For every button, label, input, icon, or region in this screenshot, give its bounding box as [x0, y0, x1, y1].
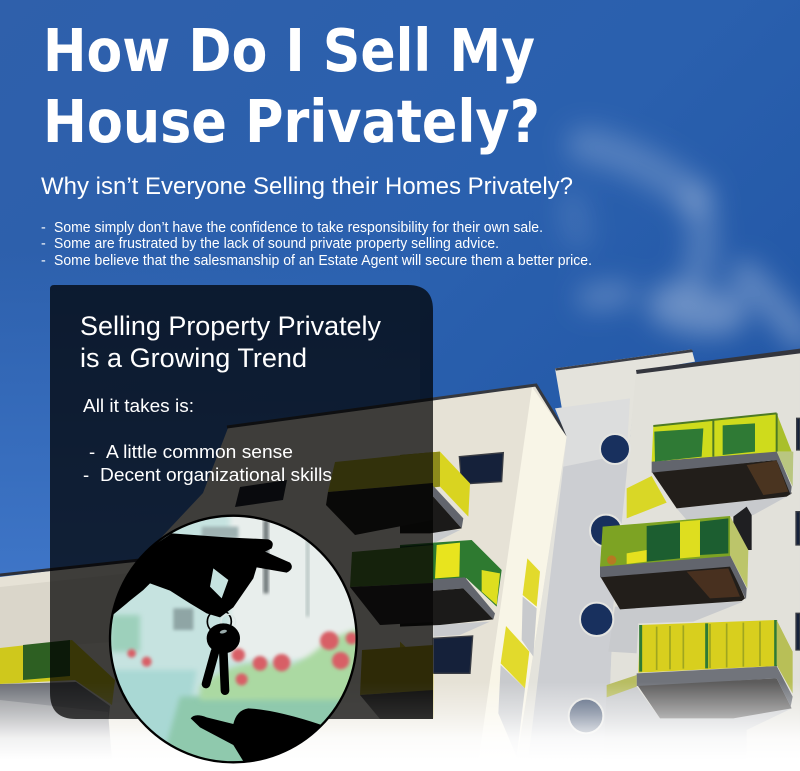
building: lower left block: [0, 385, 568, 771]
panel heading: is a Growing Trend: [80, 343, 307, 373]
building: right block: [607, 350, 800, 771]
subtitle: Why isn’t Everyone Selling their Homes Privately?: [41, 173, 573, 200]
building: square windows: [433, 418, 800, 673]
panel heading: Selling Property Privately: [80, 311, 382, 341]
icon: upper hand: [107, 533, 292, 620]
balcony: right middle: [600, 516, 748, 609]
panel: growing trend: [50, 285, 433, 719]
clouds: [572, 145, 800, 335]
reasons list: -: [41, 236, 46, 252]
building: central tower: [515, 349, 695, 771]
balcony: under panel upper: [326, 452, 433, 535]
panel text: -: [89, 441, 95, 462]
reasons list: [41, 220, 592, 269]
balcony: under panel lower: [350, 545, 433, 625]
reasons list: -: [41, 253, 46, 269]
title: How Do I Sell My: [43, 16, 535, 85]
title: [43, 16, 540, 156]
reasons list: Some believe that the salesmanship of an Estate Agent will secure them a better price.: [54, 253, 592, 269]
balcony: right top: [652, 413, 793, 508]
balcony: centre upper: [400, 452, 470, 533]
balcony: under panel bottom: [360, 645, 433, 719]
title: House Privately?: [43, 87, 540, 156]
balcony: lower left: [0, 640, 115, 760]
icon: hands passing keys in circle: [107, 510, 370, 767]
apartment building photo: [0, 349, 800, 771]
building: round windows: [569, 434, 630, 733]
reasons list: -: [41, 220, 46, 236]
panel text: Decent organizational skills: [100, 464, 332, 485]
balcony: centre lower: [400, 540, 502, 627]
panel text: All it takes is:: [83, 395, 194, 416]
panel text: -: [83, 464, 89, 485]
blurred garden backdrop: [110, 510, 370, 767]
reasons list: Some simply don’t have the confidence to take responsibility for their own sale.: [54, 220, 543, 236]
building: yellow reflections: [501, 558, 540, 688]
icon: keys: [206, 610, 240, 691]
building: wall shadows: [433, 497, 792, 771]
balcony: bottom centre: [400, 642, 433, 718]
reasons list: Some are frustrated by the lack of sound private property selling advice.: [54, 236, 499, 252]
panel text: A little common sense: [106, 441, 293, 462]
balcony: right lower: [607, 620, 793, 718]
icon: lower hand: [191, 708, 322, 767]
bottom white fade: [0, 682, 800, 760]
panel text: [83, 395, 332, 485]
panel heading: [80, 311, 382, 373]
